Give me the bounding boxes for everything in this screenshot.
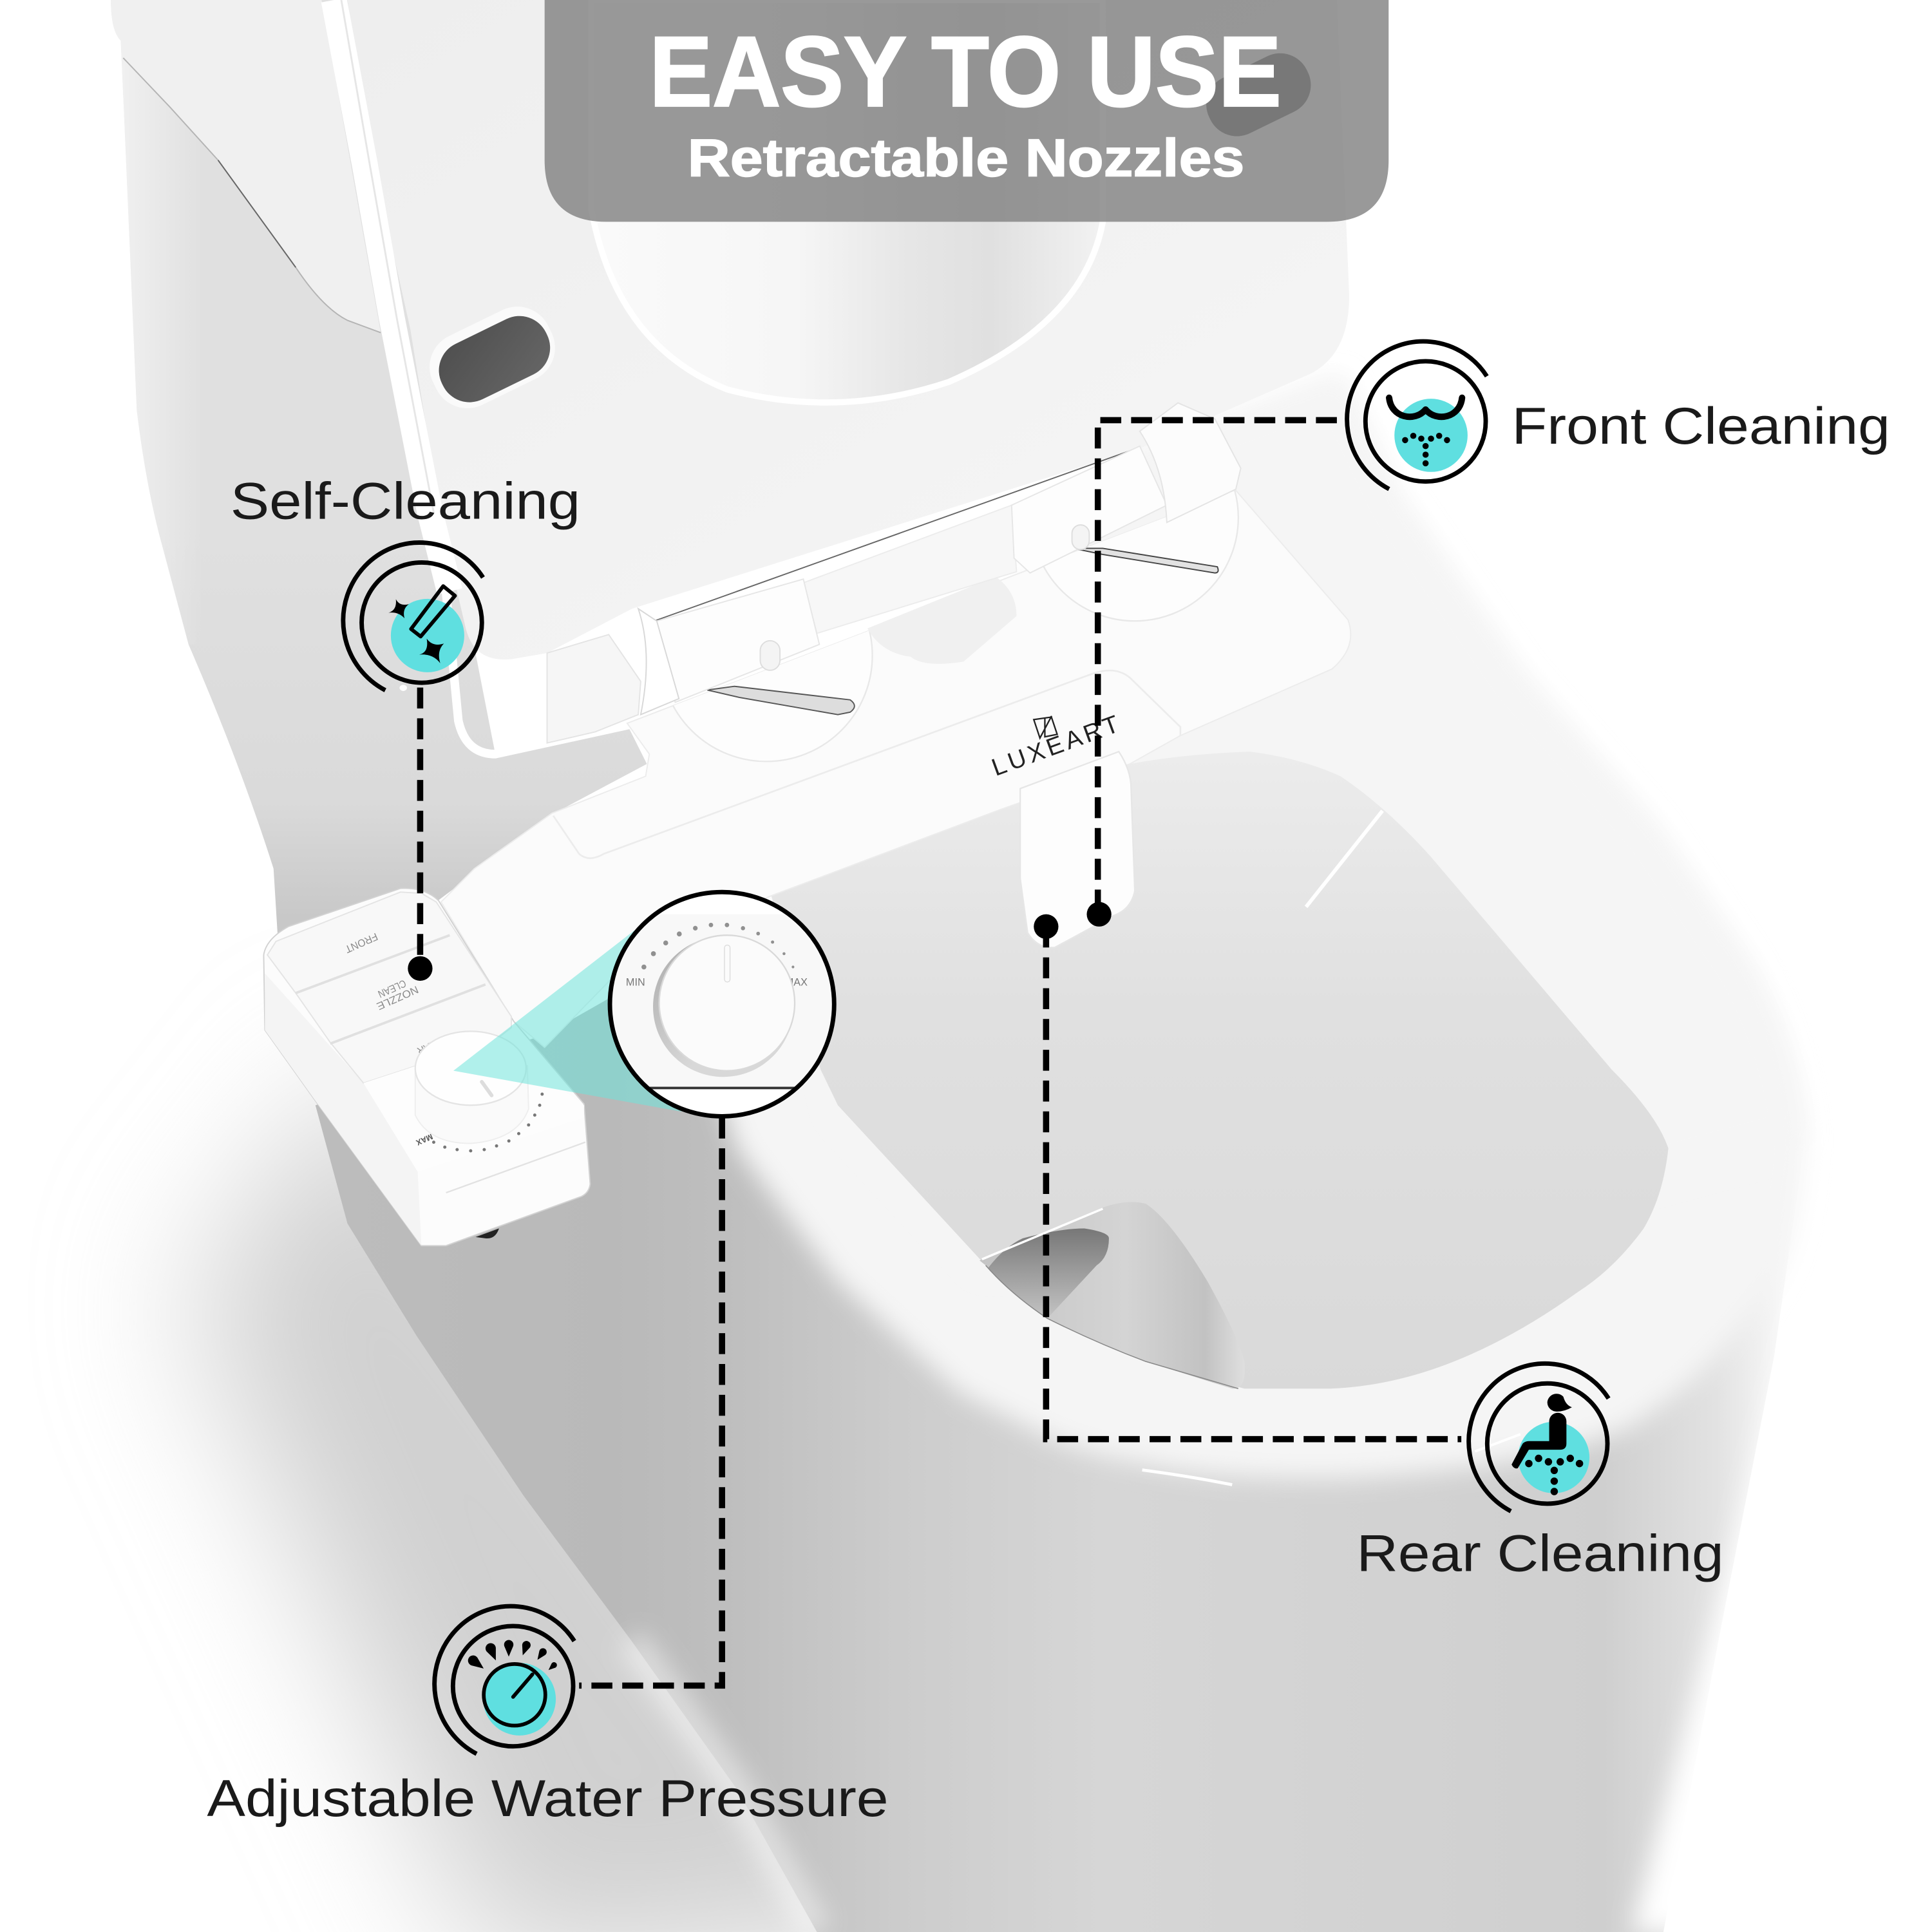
NOZZLE label: NOZZLE [375, 983, 420, 1012]
hinge bump right [1072, 525, 1089, 549]
icon: self-cleaning [343, 543, 483, 691]
hinge segment left [657, 579, 819, 703]
bowl basin [772, 752, 1669, 1388]
rim streak near rear icon [1475, 1434, 1520, 1452]
floor shadow [185, 1059, 986, 1932]
slot right [1073, 548, 1218, 573]
tank crease [123, 58, 381, 333]
icon: water pressure [435, 1606, 574, 1754]
lid inner recess [591, 0, 1103, 402]
knob top [415, 1031, 526, 1105]
seat side strip [334, 0, 450, 591]
dial plate [604, 914, 838, 1087]
spray dots [1402, 433, 1450, 466]
tank upper panel [111, 0, 381, 333]
label: rear cleaning: Rear Cleaning [1357, 1524, 1724, 1582]
sparkle small [388, 599, 409, 618]
rim edge area [788, 376, 1801, 1269]
plate cutout [867, 576, 1016, 664]
label: adjustable water pressure: Adjustable Water Pressure [207, 1770, 888, 1828]
label: front cleaning: Front Cleaning [1512, 397, 1890, 455]
bidet plate [440, 490, 1351, 1048]
connector: water pressure [579, 1117, 722, 1685]
knob pointer [482, 1082, 491, 1095]
dial shadow [653, 936, 793, 1077]
title banner [545, 0, 1388, 222]
plate raised strip [553, 670, 1180, 858]
CLEAN label: CLEAN [376, 977, 408, 1000]
logo wordmark: LUXEART [988, 710, 1122, 782]
box top lower plate [363, 1040, 584, 1172]
label: self-cleaning: Self-Cleaning [231, 472, 580, 530]
nozzle brush [411, 586, 455, 636]
subtitle: Retractable Nozzles [688, 129, 1244, 188]
connector: self-cleaning [408, 688, 433, 981]
FRONT label: FRONT [343, 931, 379, 955]
callout magnifier: pressure dial [604, 892, 838, 1116]
gauge needle [513, 1674, 533, 1697]
pedestal right fade [1633, 1232, 1861, 1932]
bowl rim [708, 376, 1805, 1479]
control box [263, 888, 590, 1245]
spray dots [1525, 1455, 1583, 1495]
box seam [446, 1142, 585, 1193]
gauge [484, 1664, 545, 1726]
REAR label: REAR [415, 1035, 445, 1057]
nozzle [1020, 752, 1135, 947]
drain [980, 1202, 1245, 1388]
MAX label: MAX [414, 1132, 434, 1147]
connector: front cleaning [1087, 420, 1337, 927]
rim inner edge [986, 1265, 1238, 1388]
drain opening [988, 1229, 1109, 1318]
icon: rear cleaning [1469, 1363, 1609, 1511]
icon: front cleaning [1347, 341, 1487, 489]
basin highlight [1306, 811, 1383, 907]
MIN label: MIN [626, 977, 645, 989]
hinge segment right [1012, 446, 1167, 573]
water drops [466, 1640, 558, 1672]
seat corner strip [445, 579, 631, 754]
box foot [476, 1229, 499, 1238]
dark side bumper right [1197, 43, 1321, 146]
dial ticks [432, 1092, 544, 1152]
tank edge light [111, 0, 283, 645]
dark side bumper left [418, 295, 567, 420]
magnifier ring [610, 892, 834, 1116]
tank crease dark [218, 160, 296, 267]
hinge bar [803, 505, 1016, 633]
tank side [111, 0, 647, 949]
lid edge dark line [654, 448, 1140, 621]
tick dots [641, 923, 794, 969]
front wash symbol [1389, 398, 1462, 417]
seated figure [1511, 1394, 1572, 1468]
body highlight [1142, 1470, 1232, 1484]
sparkle large [419, 639, 444, 663]
button separators [296, 935, 486, 1044]
MAX label: MAX [785, 977, 808, 989]
hinge assembly [547, 403, 1241, 743]
logo mark [1034, 716, 1057, 738]
dial face [659, 935, 795, 1071]
slot left [707, 687, 855, 715]
dial pointer [724, 945, 730, 982]
teal wedge [453, 931, 739, 1112]
plate discs [672, 491, 1239, 762]
box top panel [267, 892, 511, 1083]
knob body [415, 1066, 529, 1144]
hinge clip left [638, 609, 679, 715]
pedestal body [316, 862, 1805, 1932]
box left face [265, 973, 421, 1245]
hinge bump [760, 641, 780, 670]
strip inner line [341, 0, 433, 513]
sparkle glint [399, 685, 407, 691]
seat lid [348, 0, 1349, 659]
logo [988, 710, 1122, 782]
connector: rear cleaning [1034, 914, 1461, 1439]
hinge cap right [1140, 403, 1241, 522]
pedestal left reflection [631, 1640, 817, 1932]
hinge cylinder left [547, 634, 641, 743]
drain lip [982, 1209, 1103, 1259]
title: EASY TO USE [649, 16, 1282, 128]
plate bottom line [649, 1087, 795, 1090]
